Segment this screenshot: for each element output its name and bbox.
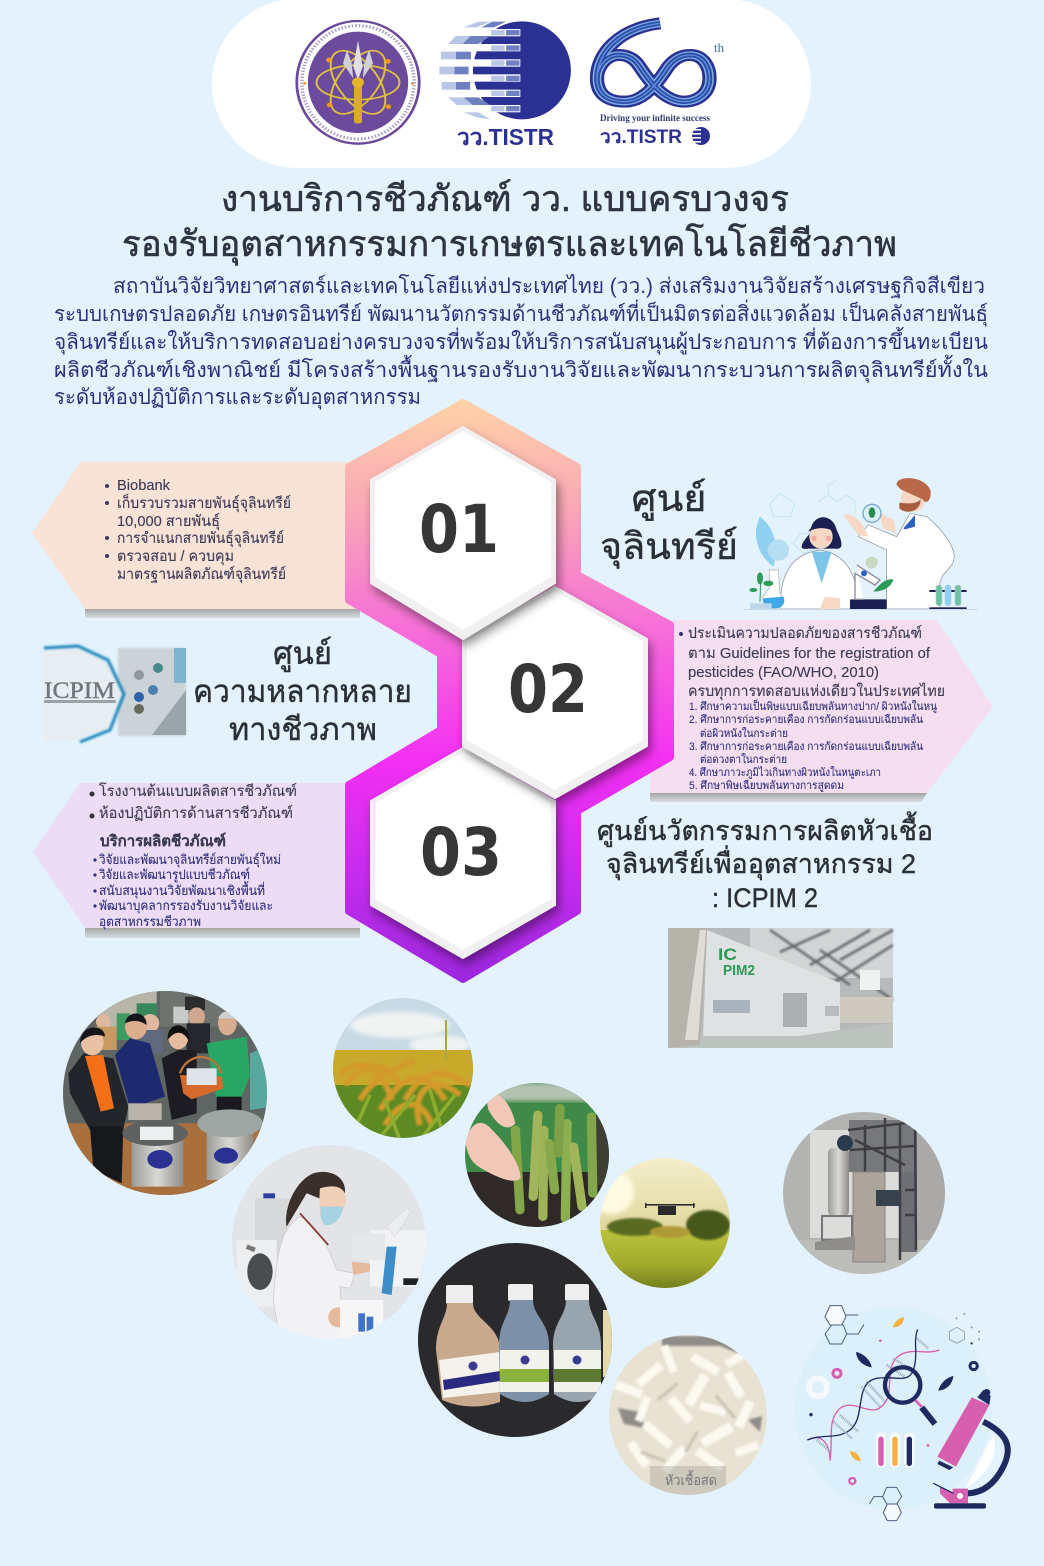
panel: 02 safety testing arrow: ต่อดวงตาในกระต่าย xyxy=(700,753,787,766)
panel: 01 biobank arrow: 10,000 สายพันธุ์ xyxy=(117,513,220,531)
icon: hexagon molecule bottom xyxy=(869,1487,902,1521)
panel: 02 safety testing arrow: ครบทุกการทดสอบแห่งเดียวในประเทศไทย xyxy=(688,682,945,701)
panel: 03 production arrow: ห้องปฏิบัติการด้านสารชีวภัณฑ์ xyxy=(99,805,293,822)
icon: leaves xyxy=(850,1317,953,1461)
title xyxy=(122,178,897,266)
photo: asparagus xyxy=(465,1083,618,1232)
icon: hexagon molecule right xyxy=(949,1313,980,1344)
logo: ministry emblem xyxy=(297,21,419,144)
panel: 01 biobank arrow: ตรวจสอบ / ควบคุม xyxy=(117,548,234,566)
intro paragraph: ผลิตชีวภัณฑ์เชิงพาณิชย์ มีโครงสร้างพื้นฐานรองรับงานวิจัยและพัฒนากระบวนการผลิตจุลินทรีย์ทั้งใน xyxy=(54,355,988,383)
panel: 02 safety testing arrow: pesticides (FAO/WHO, 2010) xyxy=(688,664,879,681)
hexagon 03 xyxy=(371,748,555,958)
photo: biological product bottles xyxy=(418,1242,613,1438)
logo text: TISTR: วว.TISTR xyxy=(457,124,554,150)
photo: ICPIM 2 building: IC xyxy=(718,945,737,964)
icon: hexagon molecule xyxy=(825,1306,864,1344)
panel: 03 production arrow: วิจัยและพัฒนารูปแบบชีวภัณฑ์ xyxy=(98,867,250,883)
photo: ICPIM signage xyxy=(44,646,186,742)
icon: test tubes xyxy=(876,1433,915,1468)
intro paragraph: ระดับห้องปฏิบัติการและระดับอุตสาหกรรม xyxy=(54,386,421,410)
panel: 02 safety testing arrow: ต่อผิวหนังในกระต่าย xyxy=(700,727,788,740)
heading: ICPIM 2 centre xyxy=(597,811,933,913)
panel: 02 safety testing arrow: 1. ศึกษาความเป็นพิษแบบเฉียบพลันทางปาก/ ผิวหนังในหนู xyxy=(689,699,937,713)
logo text: 60th TISTR: วว.TISTR xyxy=(600,127,682,148)
hexagon 03: 03 xyxy=(420,814,502,891)
heading: biodiversity centre: ความหลากหลาย xyxy=(193,674,412,709)
panel: 03 production arrow: อุตสาหกรรมชีวภาพ xyxy=(99,914,201,930)
title: รองรับอุตสาหกรรมการเกษตรและเทคโนโลยีชีวภาพ xyxy=(122,223,897,266)
photo: ICPIM 2 building: PIM2 xyxy=(723,962,755,979)
heading: biodiversity centre: ศูนย์ xyxy=(273,636,332,672)
panel: 02 safety testing arrow: 4. ศึกษาภาวะภูมิไวเกินทางผิวหนังในหนูตะเภา xyxy=(689,766,881,779)
panel: 03 production arrow: บริการผลิตชีวภัณฑ์ xyxy=(100,832,226,850)
title: งานบริการชีวภัณฑ์ วว. แบบครบวงจร xyxy=(221,178,789,219)
intro paragraph: สถาบันวิจัยวิทยาศาสตร์และเทคโนโลยีแห่งประเทศไทย (วว.) ส่งเสริมงานวิจัยสร้างเศรษฐกิจสีเขียว xyxy=(113,274,985,298)
intro paragraph: ระบบเกษตรปลอดภัย เกษตรอินทรีย์ พัฒนานวัตกรรมด้านชีวภัณฑ์ที่เป็นมิตรต่อสิ่งแวดล้อม เป็นคลังสายพันธุ์ xyxy=(54,299,988,327)
icon: magnifying glass xyxy=(885,1367,935,1424)
panel: 03 production arrow: สนับสนุนงานวิจัยพัฒนาเชิงพื้นที่ xyxy=(99,881,265,899)
photo: fresh inoculum rice xyxy=(609,1335,769,1497)
icon: DNA helix xyxy=(807,1329,939,1461)
panel: 01 biobank arrow xyxy=(32,462,360,618)
logo text: th: th xyxy=(714,40,725,55)
illustration: DNA and microscope xyxy=(795,1306,1008,1521)
panel: 03 production arrow xyxy=(33,782,360,938)
panel: 02 safety testing arrow xyxy=(650,620,993,802)
photo: bioreactor xyxy=(783,1112,946,1275)
heading: biodiversity centre: ทางชีวภาพ xyxy=(229,712,377,747)
icon: microscope xyxy=(933,1389,1008,1509)
heading: ICPIM 2 centre: จุลินทรีย์เพื่ออุตสาหกรรม 2 xyxy=(606,845,916,881)
heading: ICPIM 2 centre: : ICPIM 2 xyxy=(712,883,818,913)
intro paragraph: จุลินทรีย์และให้บริการทดสอบอย่างครบวงจรที่พร้อมให้บริการสนับสนุนผู้ประกอบการ ที่ต้องการขึ้นทะเบียน xyxy=(54,327,988,355)
intro paragraph xyxy=(54,274,988,410)
panel: 03 production arrow: โรงงานต้นแบบผลิตสารชีวภัณฑ์ xyxy=(99,782,297,800)
logo mark: small TISTR xyxy=(686,127,710,145)
panel: 03 production arrow: วิจัยและพัฒนาจุลินทรีย์สายพันธุ์ใหม่ xyxy=(98,852,281,868)
heading: ICPIM 2 centre: ศูนย์นวัตกรรมการผลิตหัวเชื้อ xyxy=(597,811,933,847)
photo: ICPIM signage: ICPIM xyxy=(44,678,115,703)
photo: people with tanks xyxy=(63,990,272,1197)
panel: 02 safety testing arrow: ประเมินความปลอดภัยของสารชีวภัณฑ์ xyxy=(688,625,922,642)
heading: biodiversity centre xyxy=(193,636,412,747)
panel: 01 biobank arrow: Biobank xyxy=(117,477,170,494)
panel: 01 biobank arrow: การจำแนกสายพันธุ์จุลินทรีย์ xyxy=(117,530,284,548)
photo caption: หัวเชื้อสด xyxy=(665,1470,717,1488)
icon: gears xyxy=(809,1339,977,1484)
panel: 02 safety testing arrow: ตาม Guidelines for the registration of xyxy=(688,645,931,662)
hexagon ribbon xyxy=(349,403,670,979)
logo: TISTR xyxy=(437,21,571,119)
panel: 02 safety testing arrow: 3. ศึกษาการก่อระคายเคือง การกัดกร่อนแบบเฉียบพลัน xyxy=(689,740,923,753)
panel: 02 safety testing arrow: 5. ศึกษาพิษเฉียบพลันทางการสูดดม xyxy=(689,779,844,792)
heading: microbe centre xyxy=(600,478,738,569)
photo: drone over field xyxy=(590,1158,732,1290)
logo: 60th anniversary xyxy=(597,23,710,102)
hexagon 02 xyxy=(463,587,647,798)
header logo band xyxy=(212,0,811,168)
photo: rice field xyxy=(333,998,473,1142)
heading: microbe centre: ศูนย์ xyxy=(632,478,706,521)
photo: ICPIM 2 building xyxy=(668,928,893,1048)
heading: microbe centre: จุลินทรีย์ xyxy=(600,526,738,569)
panel: 01 biobank arrow: มาตรฐานผลิตภัณฑ์จุลินทรีย์ xyxy=(117,566,286,584)
hexagon 02: 02 xyxy=(508,651,588,728)
panel: 02 safety testing arrow: 2. ศึกษาการก่อระคายเคือง การกัดกร่อนแบบเฉียบพลัน xyxy=(689,713,923,726)
logo tagline: Driving your infinite success xyxy=(600,114,710,124)
hexagon 01: 01 xyxy=(419,491,499,568)
illustration: scientists xyxy=(743,478,978,609)
panel: 03 production arrow: พัฒนาบุคลากรรองรับงานวิจัยและ xyxy=(99,898,273,914)
photo: lab scientist xyxy=(231,1144,427,1340)
hexagon 01 xyxy=(371,427,555,639)
panel: 01 biobank arrow: เก็บรวบรวมสายพันธุ์จุลินทรีย์ xyxy=(117,493,291,513)
